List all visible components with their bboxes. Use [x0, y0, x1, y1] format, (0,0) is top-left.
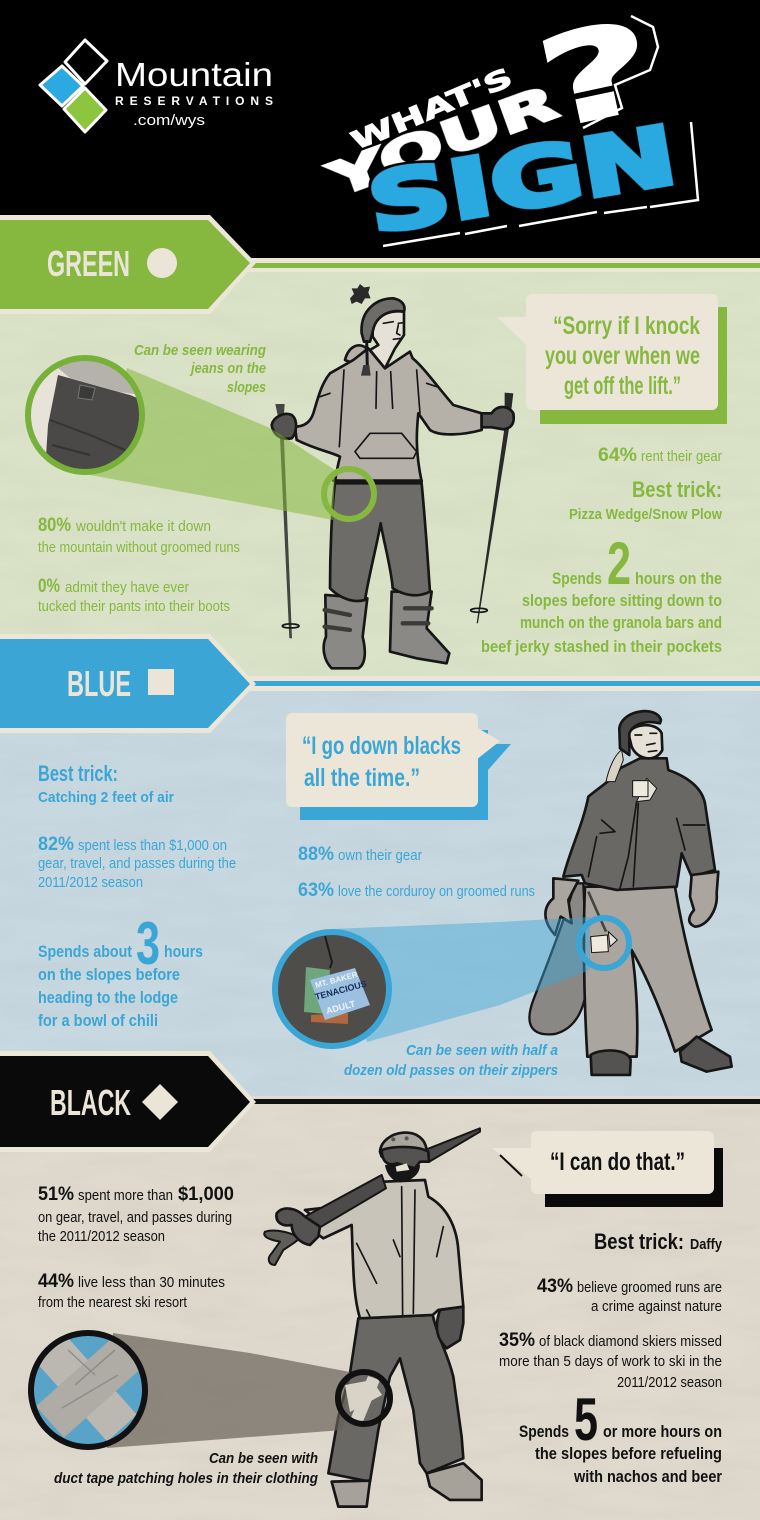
green stats left: admit they have ever	[65, 579, 189, 596]
callout photo: lift passes	[275, 932, 389, 1046]
illustration: black skier	[264, 1128, 482, 1507]
blue stats left: on the slopes before	[38, 965, 180, 984]
panel: green	[0, 258, 760, 688]
pants	[584, 887, 712, 1057]
logo: .com/wys	[133, 112, 205, 129]
green stats left: 0%	[38, 576, 60, 597]
green caption: jeans on the	[189, 360, 266, 377]
green stats right: slopes before sitting down to	[522, 591, 722, 610]
title	[321, 0, 698, 252]
target circle: black with tape	[338, 1372, 390, 1424]
header background	[0, 0, 760, 270]
blue stats left: 3	[136, 910, 160, 977]
head and hat	[350, 284, 404, 376]
black stats left: on gear, travel, and passes during	[38, 1209, 232, 1226]
cone: blue	[332, 917, 590, 1042]
black stats left: the 2011/2012 season	[38, 1228, 165, 1245]
hoodie	[295, 348, 482, 482]
green quote: “Sorry if I knock	[553, 312, 700, 340]
jacket	[563, 758, 715, 890]
callout photo: duct tape	[31, 1333, 145, 1447]
logo	[40, 40, 273, 132]
green tab	[0, 215, 256, 314]
green stats left: wouldn't make it down	[75, 518, 211, 535]
tags	[588, 778, 657, 953]
callout photo: lift passes: TENACIOUS	[314, 979, 368, 1002]
green stats right: rent their gear	[641, 448, 722, 465]
ski poles	[275, 393, 513, 638]
black stats right: of black diamond skiers missed	[539, 1333, 722, 1350]
blue stats right: love the corduroy on groomed runs	[338, 883, 535, 900]
blue stats left: Catching 2 feet of air	[38, 789, 174, 806]
black stats right: 43%	[537, 1276, 573, 1297]
green stats right: 64%	[598, 445, 637, 466]
gloves	[272, 407, 514, 439]
callout photo: lift passes: ADULT	[325, 998, 357, 1016]
callout photo: jeans	[28, 358, 142, 472]
title: YOUR	[321, 75, 564, 208]
green quote	[497, 294, 727, 424]
blue stats right: 63%	[298, 880, 334, 901]
boots	[591, 1037, 732, 1075]
hood	[345, 345, 373, 365]
blue caption: Can be seen with half a	[406, 1042, 558, 1059]
blue quote	[286, 713, 511, 820]
logo: RESERVATIONS	[115, 94, 273, 108]
blue stats left: 2011/2012 season	[38, 874, 143, 891]
logo: Mountain	[115, 56, 273, 93]
pants	[330, 483, 430, 601]
illustration: green skier	[272, 284, 514, 668]
pants	[328, 1315, 463, 1482]
panel: blue	[0, 676, 760, 1102]
green stats right: Best trick:	[632, 477, 722, 502]
green caption	[134, 342, 266, 396]
black stats left: 51%	[38, 1184, 74, 1205]
black stats right: with nachos and beer	[573, 1467, 722, 1486]
green stats right: beef jerky stashed in their pockets	[481, 637, 722, 656]
green stats right: Pizza Wedge/Snow Plow	[569, 506, 722, 523]
blue caption: dozen old passes on their zippers	[344, 1062, 558, 1079]
blue quote: “I go down blacks	[302, 732, 461, 760]
cone: black	[107, 1333, 350, 1448]
blue stats left: for a bowl of chili	[38, 1011, 158, 1030]
green stats left: tucked their pants into their boots	[38, 598, 230, 615]
blue stats left: heading to the lodge	[38, 988, 178, 1007]
black quote: “I can do that.”	[550, 1148, 685, 1176]
black stats right	[499, 1229, 723, 1486]
target circle: green	[324, 469, 374, 519]
head	[606, 711, 662, 782]
blue caption	[344, 1042, 558, 1079]
blue stats right: own their gear	[338, 847, 422, 864]
blue stats left	[38, 761, 236, 1030]
black stats right: Spends	[519, 1422, 569, 1441]
jacket details	[588, 802, 705, 888]
blue stats left: Best trick:	[38, 761, 118, 786]
gloves	[276, 1208, 463, 1348]
green quote: you over when we	[545, 342, 700, 370]
black stats left: $1,000	[178, 1184, 234, 1205]
hoodie details	[320, 370, 437, 481]
black stats left: 44%	[38, 1271, 74, 1292]
green stats left	[38, 515, 240, 615]
black stats right: the slopes before refueling	[535, 1444, 722, 1463]
far ski tips	[264, 1231, 300, 1265]
blue stats left: Spends about	[38, 942, 132, 961]
skis	[305, 1128, 480, 1228]
target circle: blue	[579, 918, 629, 968]
cone: green	[90, 368, 335, 520]
boots	[332, 1463, 482, 1507]
black stats left: live less than 30 minutes	[78, 1274, 225, 1291]
jacket details	[357, 1187, 443, 1317]
blue stats left: hours	[164, 942, 203, 961]
blue stats right	[298, 844, 535, 901]
panel: black	[0, 1096, 760, 1520]
title: SIGN	[362, 109, 683, 252]
blue stats left: 82%	[38, 834, 74, 855]
boots	[324, 592, 449, 668]
blue stats left: spent less than $1,000 on	[78, 837, 227, 854]
black caption: duct tape patching holes in their clothing	[54, 1470, 318, 1487]
black stats left	[38, 1184, 234, 1311]
blue tab: BLUE	[67, 663, 131, 704]
black stats right: 2011/2012 season	[617, 1374, 722, 1391]
black stats right: 35%	[499, 1330, 535, 1351]
gloves	[545, 872, 718, 935]
jacket	[305, 1180, 463, 1318]
black stats right: 5	[574, 1386, 598, 1453]
green stats right	[481, 445, 722, 656]
blue stats right: 88%	[298, 844, 334, 865]
snowboard	[529, 883, 587, 1034]
black stats right: Best trick:	[594, 1229, 684, 1254]
black stats left: spent more than	[78, 1187, 173, 1204]
black stats right: believe groomed runs are	[577, 1279, 722, 1296]
black tab	[0, 1051, 256, 1152]
title: WHAT'S	[347, 63, 517, 157]
green stats left: 80%	[38, 515, 71, 536]
black caption: Can be seen with	[209, 1450, 318, 1467]
black stats right: more than 5 days of work to ski in the	[499, 1353, 722, 1370]
green stats right: hours on the	[635, 569, 722, 588]
blue tab	[0, 634, 256, 733]
black stats right: or more hours on	[603, 1422, 722, 1441]
black stats right: Daffy	[690, 1236, 723, 1253]
green caption: slopes	[227, 379, 266, 396]
blue quote: all the time.”	[304, 764, 420, 792]
green tab: GREEN	[47, 243, 130, 284]
green stats left: the mountain without groomed runs	[38, 539, 240, 556]
head	[380, 1133, 429, 1182]
illustration: blue snowboarder	[529, 711, 732, 1075]
black stats right: a crime against nature	[591, 1298, 722, 1315]
green stats right: Spends	[552, 569, 602, 588]
black tab: BLACK	[50, 1082, 131, 1123]
green quote: get off the lift.”	[564, 372, 681, 400]
black stats left: from the nearest ski resort	[38, 1294, 188, 1311]
black caption	[54, 1450, 318, 1487]
green stats right: 2	[607, 530, 631, 597]
black quote	[492, 1131, 723, 1207]
green caption: Can be seen wearing	[134, 342, 266, 359]
blue stats left: gear, travel, and passes during the	[38, 855, 236, 872]
callout photo: lift passes: MT. BAKER	[314, 970, 359, 990]
